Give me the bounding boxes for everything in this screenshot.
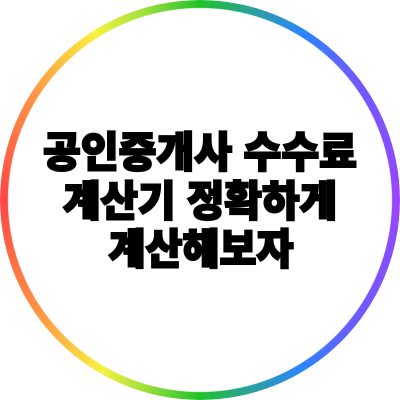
title: 공인중개사 수수료 [43, 129, 357, 176]
title: 계산기 정확하게 [63, 178, 337, 225]
title: 계산해보자 [108, 226, 294, 273]
